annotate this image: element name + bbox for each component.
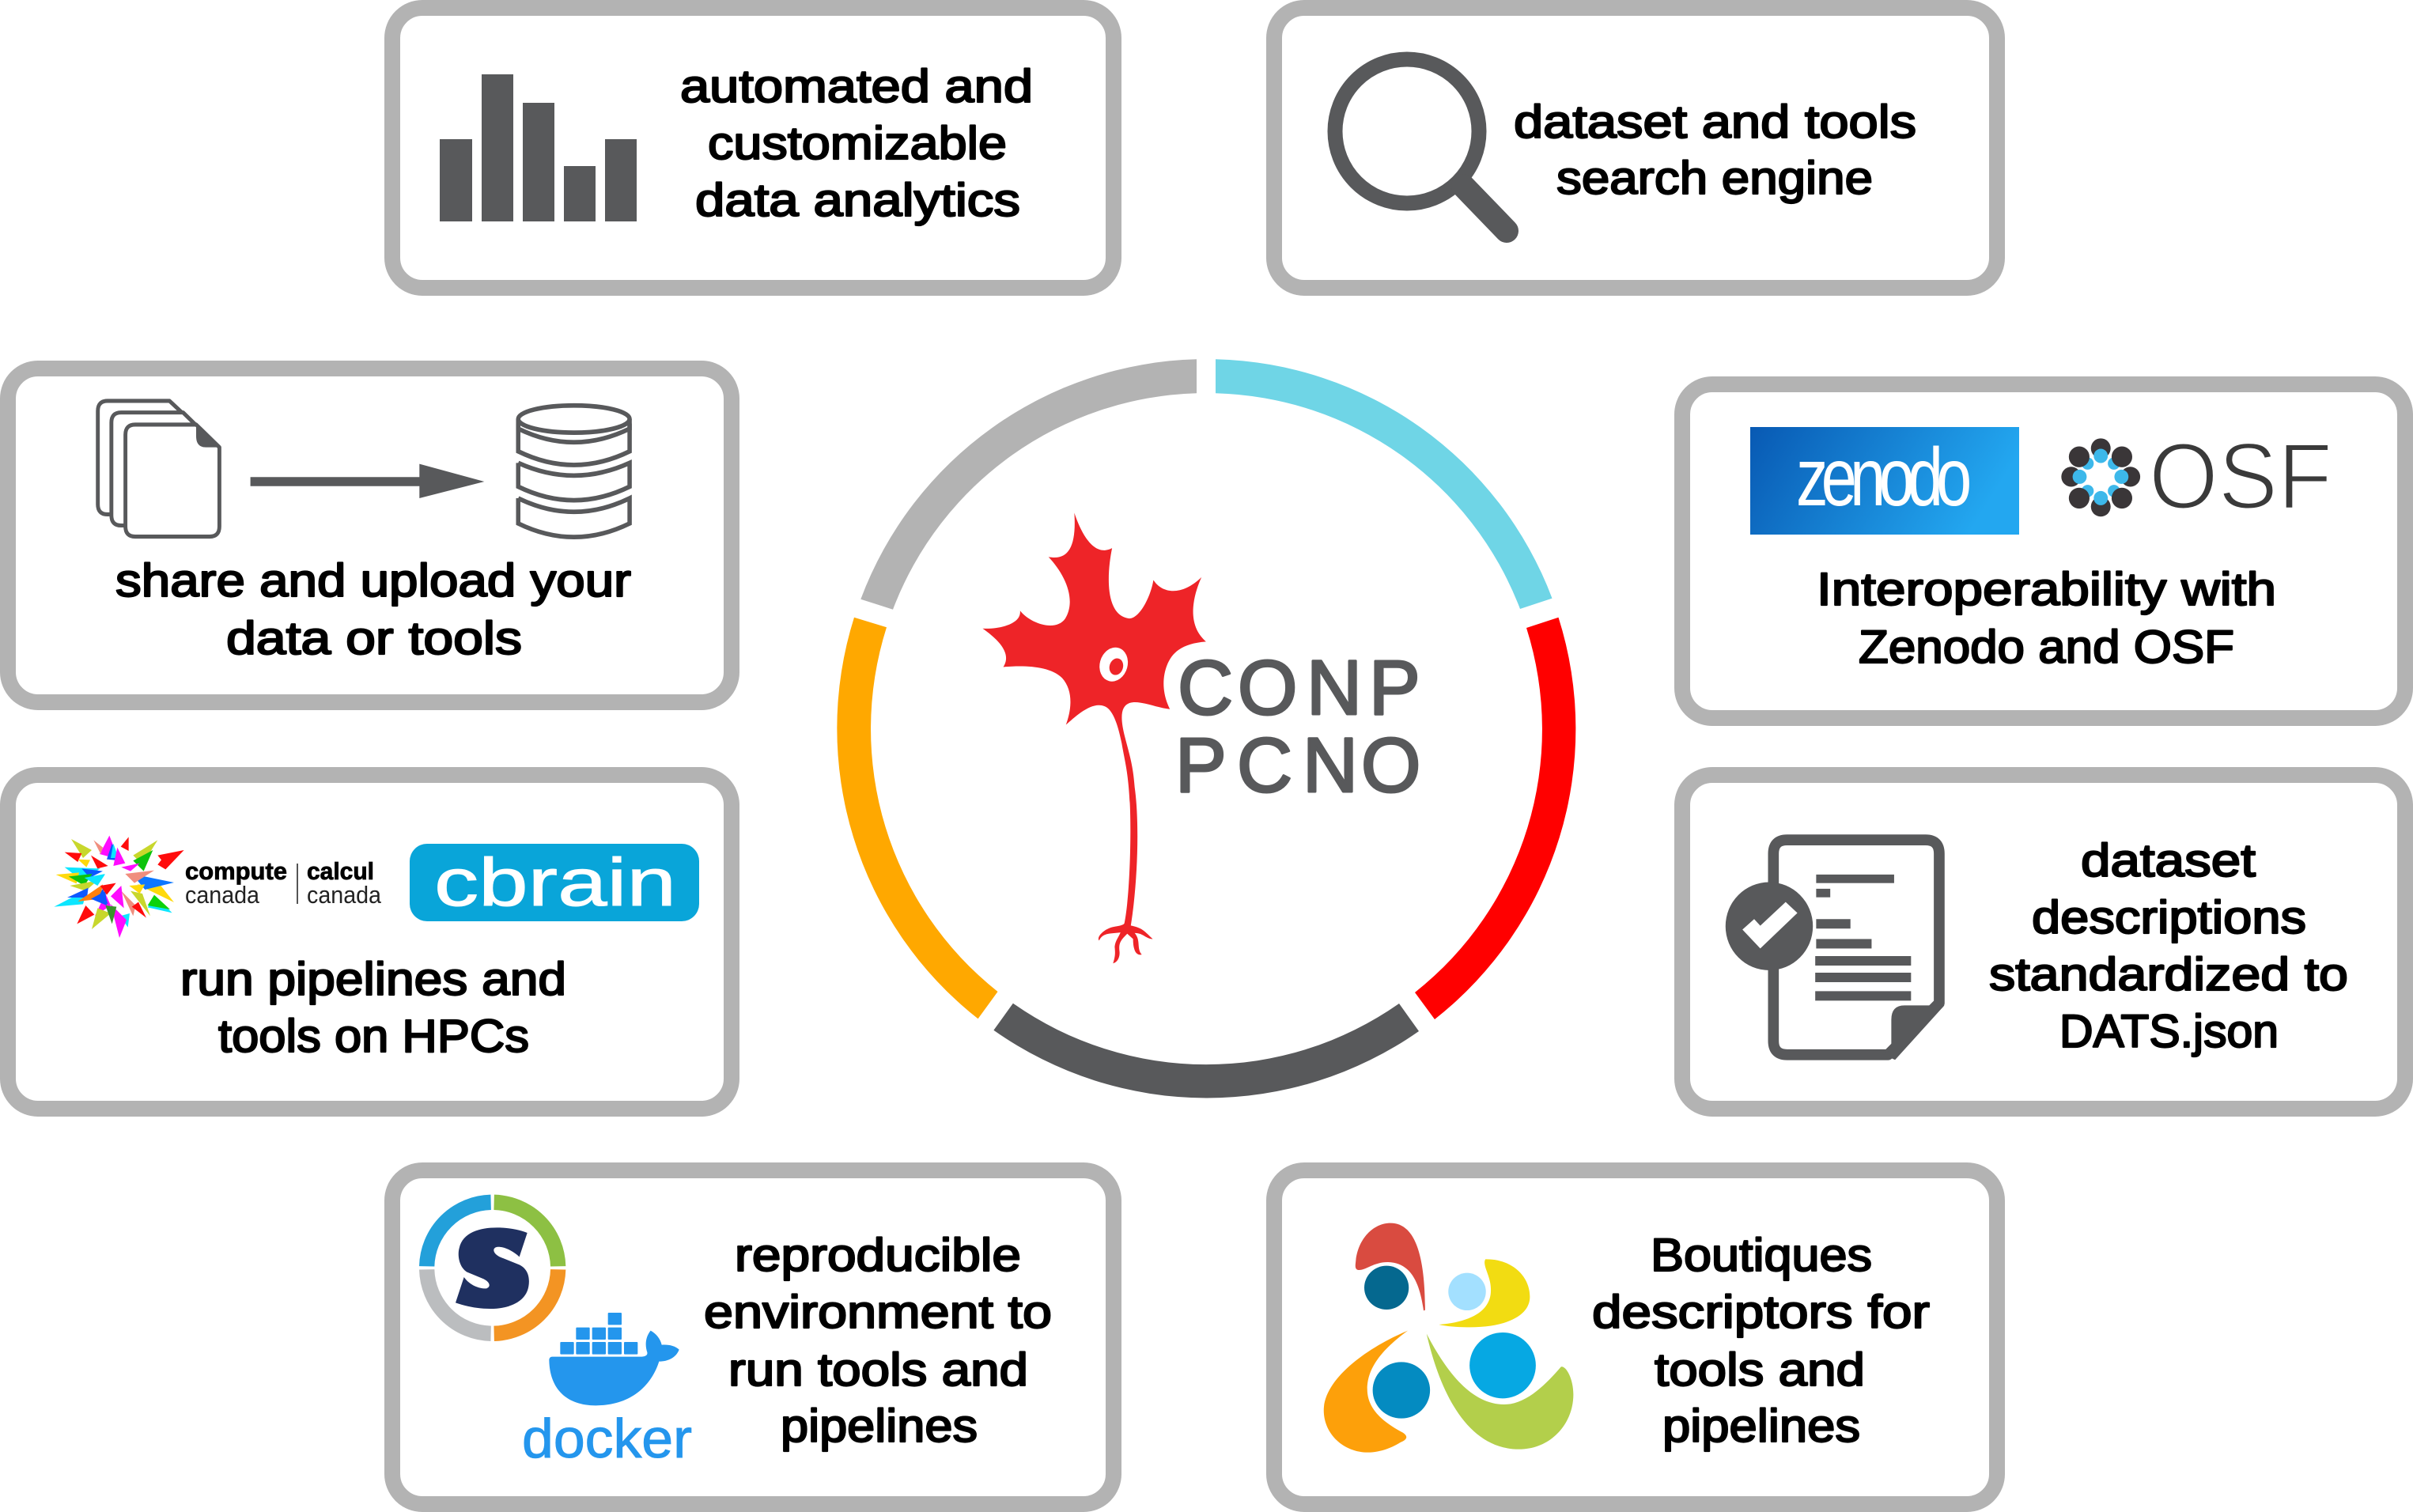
logo text: OSF: OSF <box>2149 424 2332 529</box>
logo text: docker: docker <box>522 1408 692 1469</box>
text: automated analytics <box>680 61 1033 226</box>
logo text: compute canada calcul canada: canada <box>307 881 382 909</box>
icon: document with check <box>1726 840 1944 1060</box>
text: automated analytics: data analytics <box>695 175 1020 226</box>
panel: interoperability with Zenodo and OSF <box>1682 384 2405 718</box>
logo: red maple leaf neuron <box>982 512 1206 963</box>
text: run pipelines <box>180 954 566 1062</box>
panel: dataset descriptions <box>1682 775 2405 1109</box>
text: automated analytics: customizable <box>708 118 1007 169</box>
panel: share and upload <box>8 369 732 702</box>
text: reproducible environment: reproducible <box>735 1230 1021 1281</box>
central ring with five segments <box>837 359 1575 1098</box>
text: share and upload: share and upload your <box>115 555 631 607</box>
logo: cbrain: cbrain <box>434 845 676 920</box>
text: Boutiques descriptors: tools and <box>1655 1344 1865 1396</box>
icon: bar chart <box>440 74 637 221</box>
text: interoperability: Zenodo and OSF <box>1859 622 2234 673</box>
text: dataset descriptions: DATS.json <box>2059 1006 2279 1057</box>
text: reproducible environment: pipelines <box>781 1400 978 1452</box>
logo wordmark: CONP PCNO: CONP <box>1178 644 1420 731</box>
text: Boutiques descriptors: pipelines <box>1662 1400 1860 1452</box>
logo text: compute canada calcul canada <box>185 857 382 909</box>
text: interoperability: Interoperability with <box>1817 564 2276 615</box>
logo: zenodo: zenodo <box>1796 431 1972 523</box>
text: reproducible environment: run tools and <box>728 1344 1028 1396</box>
logo: cbrain <box>410 844 699 921</box>
panel: run pipelines on HPCs <box>8 775 732 1109</box>
logo: singularity <box>427 1202 679 1405</box>
text: share and upload <box>115 555 631 664</box>
text: search engine <box>1514 96 1916 204</box>
text: dataset descriptions: descriptions <box>2032 892 2306 943</box>
logo text: compute canada calcul canada: calcul <box>307 857 374 885</box>
text: reproducible environment: environment to <box>704 1287 1052 1338</box>
logo: OSF mark <box>2061 438 2140 516</box>
text: interoperability <box>1817 564 2276 673</box>
logo wordmark: CONP PCNO: PCNO <box>1175 722 1420 808</box>
text: Boutiques descriptors: Boutiques <box>1651 1230 1872 1281</box>
text: reproducible environment <box>704 1230 1052 1452</box>
panel: automated data analytics <box>392 8 1114 288</box>
text: dataset descriptions: standardized to <box>1989 949 2348 1000</box>
logo text: compute canada calcul canada: compute <box>185 857 287 885</box>
text: search engine: search engine <box>1556 153 1873 204</box>
text: automated analytics: automated and <box>680 61 1033 112</box>
logo wordmark: CONP PCNO <box>1175 644 1420 808</box>
text: search engine: dataset and tools <box>1514 96 1916 148</box>
text: share and upload: data or tools <box>226 613 522 664</box>
text: dataset descriptions <box>1989 835 2348 1057</box>
panel: search engine <box>1274 8 1997 288</box>
logo text: compute canada calcul canada: canada <box>185 881 260 909</box>
icon: magnifying glass <box>1335 59 1507 231</box>
text: Boutiques descriptors: descriptors for <box>1592 1287 1930 1338</box>
panel: Boutiques descriptors <box>1274 1170 1997 1504</box>
icon: files to database <box>98 401 630 537</box>
text: run pipelines: tools on HPCs <box>218 1011 529 1062</box>
logo: Boutiques <box>1324 1223 1573 1453</box>
text: dataset descriptions: dataset <box>2081 835 2256 886</box>
panel: reproducible environment <box>392 1170 1114 1504</box>
text: run pipelines: run pipelines and <box>180 954 566 1005</box>
logo: zenodo <box>1750 427 2019 535</box>
logo: compute canada starburst <box>54 836 184 938</box>
text: Boutiques descriptors <box>1592 1230 1930 1452</box>
logo: docker whale <box>549 1313 679 1405</box>
